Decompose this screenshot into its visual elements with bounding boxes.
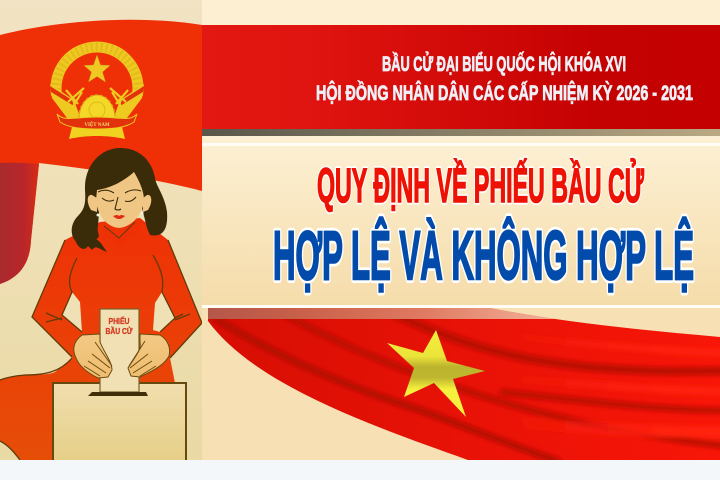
- collar: [104, 222, 142, 246]
- panel: header band: [202, 25, 720, 136]
- woman voter: [0, 148, 202, 460]
- bottom strip: [0, 460, 720, 480]
- icon: flag star: [387, 330, 485, 417]
- waving flag: [202, 308, 720, 462]
- dress outlines: [0, 240, 202, 460]
- emblem label: VIỆT NAM: [84, 122, 110, 128]
- ballot box: [53, 383, 186, 461]
- ballot paper: BẦU CỬ: [106, 326, 133, 336]
- ballot paper: [100, 309, 139, 392]
- icon: national emblem: [50, 47, 144, 139]
- panel: title area: [202, 136, 720, 308]
- panel: left illustration: [0, 0, 202, 461]
- dark flag fold: [0, 163, 39, 284]
- eyes, nose, lips: [98, 190, 141, 210]
- ballot slot: [88, 392, 148, 396]
- ears: [88, 195, 151, 212]
- arm gaps: [62, 292, 82, 332]
- earrings: [96, 214, 100, 216]
- red flag banner: [0, 20, 202, 284]
- ballot text: PHIẾU: [108, 316, 130, 326]
- right hand: [128, 334, 170, 377]
- left hand: [74, 334, 112, 378]
- hair: [72, 148, 167, 244]
- dress: [0, 218, 202, 460]
- hair tips: [75, 238, 107, 252]
- panel: right background: [202, 0, 720, 460]
- face: [96, 172, 144, 228]
